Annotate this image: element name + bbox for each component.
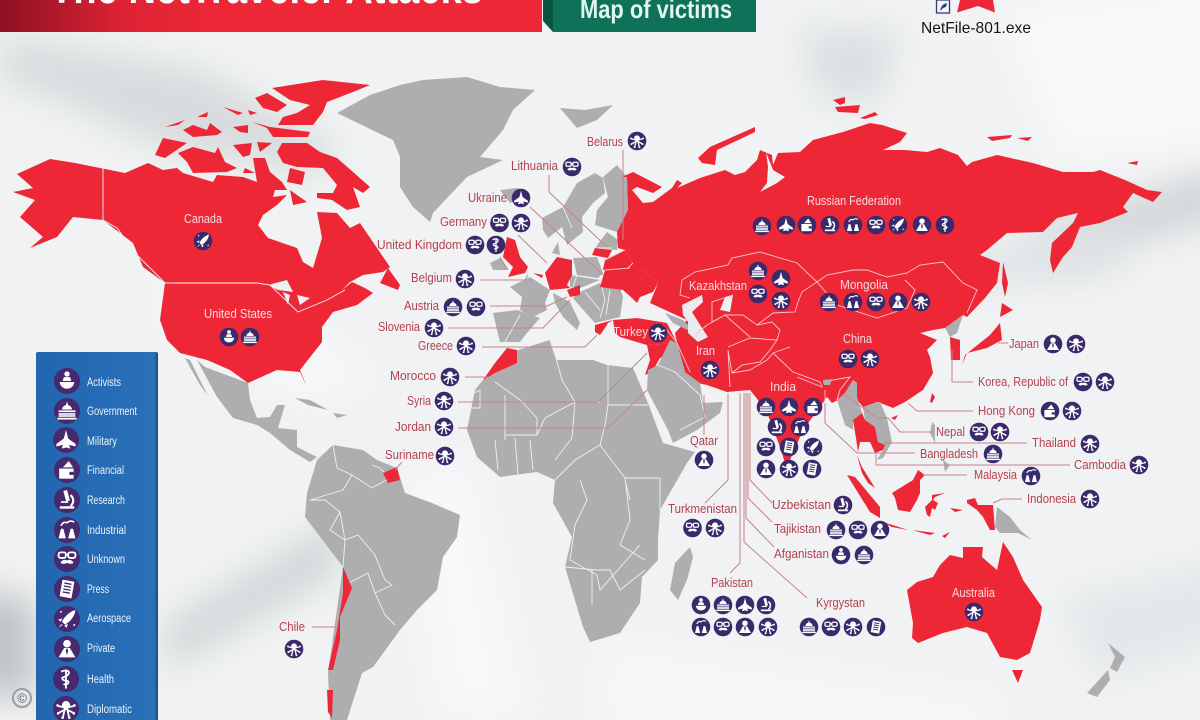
- label: Australia: Australia: [952, 586, 995, 600]
- label: Slovenia: Slovenia: [378, 320, 420, 334]
- label: Qatar: [690, 434, 718, 469]
- label: Canada: Canada: [184, 212, 222, 226]
- label: United Kingdom: [377, 236, 505, 254]
- legend item: Press: Press: [87, 584, 109, 596]
- label: Belgium: Belgium: [411, 271, 452, 285]
- label: Morocco: Morocco: [390, 369, 436, 383]
- label: Afganistan: [774, 546, 873, 564]
- label: Iran: [696, 344, 719, 379]
- leader lines connecting country labels to countries: [312, 150, 1070, 627]
- legend item: Financial: [54, 457, 124, 483]
- label: Japan: Japan: [1009, 337, 1039, 351]
- country: Suriname: [383, 467, 400, 483]
- label: Qatar: Qatar: [690, 434, 718, 448]
- label: Turkmenistan: [668, 502, 737, 537]
- label: Bangladesh: Bangladesh: [920, 447, 978, 461]
- country: Thailand and Cambodia: [853, 413, 885, 453]
- country: Germany: [545, 257, 572, 290]
- label: Belarus: Belarus: [587, 135, 623, 149]
- label: Malaysia: Malaysia: [974, 468, 1017, 482]
- icon: malware file NetFile-801.exe: NetFile-801.exe: [921, 20, 1031, 37]
- legend item: Activists: Activists: [87, 377, 121, 389]
- label: Australia: [952, 586, 995, 621]
- country: Greece: [595, 320, 613, 335]
- map: South America: [305, 445, 460, 720]
- icon: copyright mark: [13, 689, 31, 707]
- legend item: Health: [53, 666, 114, 692]
- country: Belgium: [533, 273, 543, 278]
- label: Belgium: [411, 270, 474, 288]
- legend item: Private: [54, 636, 115, 662]
- label: Thailand: Thailand: [1032, 436, 1076, 450]
- icon: copyright mark: ©: [17, 690, 27, 706]
- label: Japan: [1009, 335, 1085, 353]
- map: Arabia and Iraq: [647, 340, 723, 443]
- map: Turkey, Syria, Jordan: [613, 318, 677, 345]
- legend item: Unknown: [54, 546, 125, 572]
- label: Uzbekistan: [772, 496, 852, 514]
- country: Japan: [962, 262, 1013, 365]
- legend item: Activists: [54, 368, 121, 394]
- legend item: Diplomatic: Diplomatic: [87, 704, 132, 716]
- legend item: Industrial: [54, 517, 126, 543]
- legend item: Press: [54, 576, 109, 602]
- label: Suriname: Suriname: [385, 448, 434, 462]
- label: Kyrgystan: Kyrgystan: [816, 596, 865, 610]
- legend item: Government: Government: [87, 406, 138, 418]
- country: Malaysia and Indonesia: [847, 455, 995, 538]
- Caspian Sea: [682, 295, 708, 342]
- country: United Kingdom: [503, 237, 528, 277]
- legend item: Unknown: Unknown: [87, 554, 125, 566]
- label: Jordan: Jordan: [395, 420, 431, 434]
- legend item: Aerospace: [54, 606, 131, 632]
- country: Australia: [907, 542, 1042, 683]
- label: Ukraine: Ukraine: [468, 191, 507, 205]
- map: Greenland, Iceland, Svalbard: [337, 77, 613, 222]
- label: Suriname: [385, 447, 454, 465]
- label: Russian Federation: Russian Federation: [807, 194, 901, 208]
- legend item: Financial: Financial: [87, 465, 124, 477]
- label: Chile: Chile: [279, 620, 305, 634]
- label: Cambodia: Cambodia: [1074, 458, 1126, 472]
- label: Hong Kong: Hong Kong: [978, 404, 1035, 418]
- label: Pakistan: [692, 576, 777, 636]
- legend item: Diplomatic: [53, 696, 132, 720]
- label: Nepal: Nepal: [936, 425, 965, 439]
- legend item: Military: Military: [87, 436, 117, 448]
- legend item: Government: [54, 398, 138, 424]
- label: United States: United States: [204, 307, 272, 321]
- country: Ukraine: [600, 268, 658, 303]
- country: Belarus: [603, 250, 633, 270]
- label: India: India: [770, 380, 796, 394]
- label: Kazakhstan: Kazakhstan: [689, 279, 747, 293]
- label: Slovenia: [378, 319, 443, 337]
- title banner: [0, 0, 542, 32]
- label: Lithuania: Lithuania: [511, 159, 558, 173]
- label: United Kingdom: United Kingdom: [377, 238, 462, 252]
- label: Belarus: [587, 132, 646, 150]
- label: Uzbekistan: Uzbekistan: [772, 498, 831, 512]
- map: Canada and United States: [13, 80, 400, 387]
- label: Bangladesh: [920, 445, 1002, 463]
- legend item: Aerospace: Aerospace: [87, 613, 131, 625]
- map: Philippines: [930, 422, 950, 472]
- label: Austria: Austria: [404, 299, 439, 313]
- label: Syria: [407, 392, 453, 410]
- label: Greece: [418, 337, 475, 355]
- label: Kazakhstan: [689, 262, 790, 310]
- label: Canada: [184, 212, 222, 250]
- label: Austria: [404, 298, 485, 316]
- label: Tajikistan: [774, 521, 889, 539]
- label: Korea, Republic of: Korea, Republic of: [978, 375, 1068, 389]
- label: Chile: [279, 620, 305, 658]
- legend item: Research: [54, 487, 125, 513]
- label: Pakistan: Pakistan: [711, 576, 753, 590]
- legend item: Military: [53, 427, 117, 453]
- legend item: Research: Research: [87, 495, 125, 507]
- label: Indonesia: [1027, 490, 1099, 508]
- panel: legend of victim categories: [36, 352, 158, 720]
- map: Russia and Asia: [600, 97, 1162, 540]
- map: Africa and Madagascar: [467, 340, 695, 642]
- label: Turkmenistan: Turkmenistan: [668, 502, 737, 516]
- label: Nepal: [936, 423, 1009, 441]
- subtitle banner: Map of victims: [543, 0, 756, 32]
- label: Korea, Republic of: [978, 373, 1114, 391]
- label: Malaysia: [974, 467, 1040, 485]
- label: United States: [204, 307, 272, 346]
- country: Morocco: [483, 348, 517, 380]
- label: Russian Federation: [753, 194, 954, 235]
- country: Chile: [327, 567, 352, 718]
- map: Europe: [490, 165, 628, 342]
- label: Tajikistan: Tajikistan: [774, 522, 821, 536]
- label: Greece: Greece: [418, 339, 453, 353]
- label: Thailand: [1032, 435, 1099, 453]
- label: Mongolia: [820, 278, 930, 311]
- label: Turkey: Turkey: [613, 325, 649, 339]
- map: Central America and Caribbean: [185, 358, 347, 462]
- label: Jordan: [395, 418, 453, 436]
- label: Lithuania: [511, 158, 581, 176]
- label: Indonesia: Indonesia: [1027, 492, 1076, 506]
- label: Germany: [440, 214, 530, 232]
- label: Kyrgystan: [800, 596, 885, 636]
- label: Syria: Syria: [407, 394, 431, 408]
- label: Iran: Iran: [696, 344, 715, 358]
- country: South Korea: [950, 337, 960, 360]
- map: Great Lakes and Canadian borders: [103, 168, 345, 312]
- label: Mongolia: Mongolia: [840, 278, 888, 292]
- country: Lithuania: [592, 248, 612, 258]
- label: China: [839, 332, 879, 368]
- label: Cambodia: [1074, 456, 1148, 474]
- map: New Zealand: [1087, 643, 1125, 697]
- map: Myanmar, Laos and Vietnam: [837, 380, 862, 430]
- label: Hong Kong: [978, 402, 1081, 420]
- country: Austria and Slovenia: [567, 285, 580, 297]
- legend item: Health: Health: [87, 674, 114, 686]
- label: China: China: [843, 332, 872, 346]
- legend item: Private: Private: [87, 643, 115, 655]
- label: India: [757, 380, 822, 478]
- label: Germany: Germany: [440, 215, 488, 229]
- label: Morocco: [390, 368, 459, 386]
- label: Afganistan: Afganistan: [774, 547, 829, 561]
- label: Turkey: [613, 324, 667, 342]
- legend item: Industrial: Industrial: [87, 525, 126, 537]
- icon: malware file NetFile-801.exe: [921, 0, 1031, 37]
- label: Ukraine: [468, 189, 530, 207]
